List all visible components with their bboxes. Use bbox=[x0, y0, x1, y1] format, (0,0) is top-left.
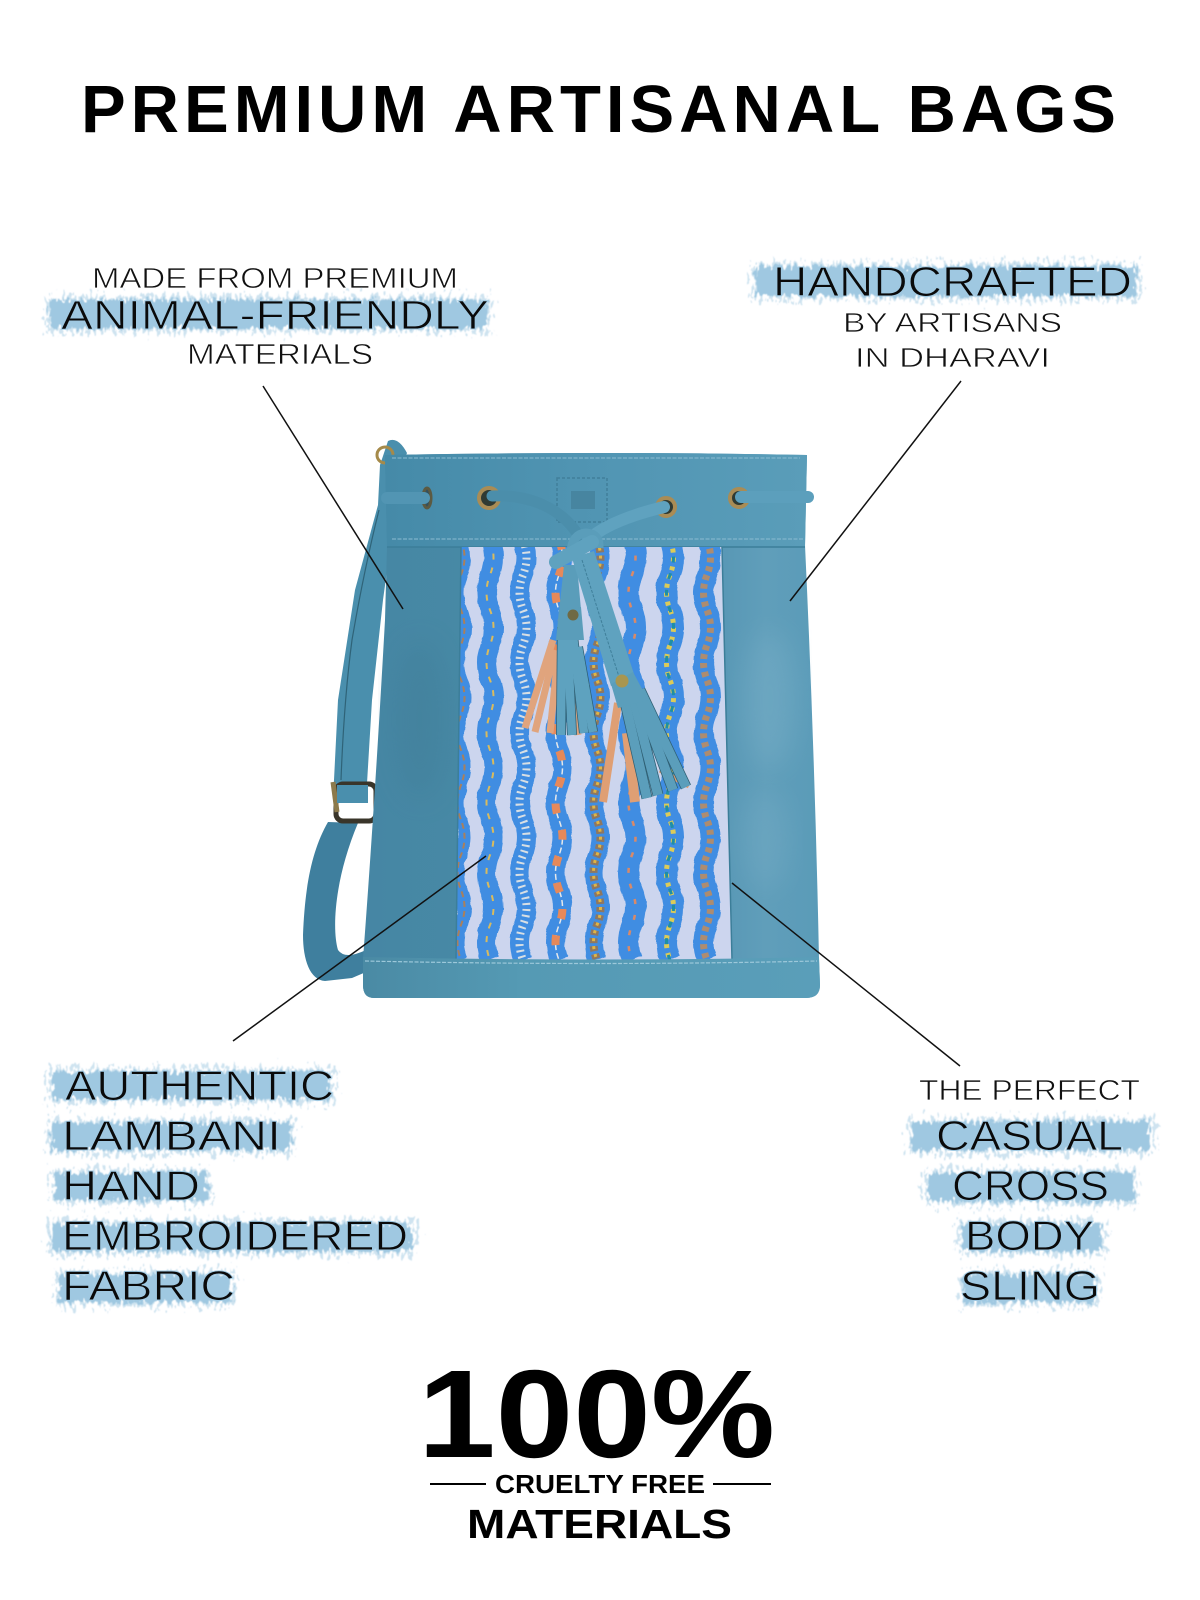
callout: handcrafted: HANDCRAFTED bbox=[773, 258, 1132, 305]
callout: animal-friendly materials: MADE FROM PREMIUM bbox=[92, 263, 458, 295]
callout: handcrafted: IN DHARAVI bbox=[855, 342, 1050, 373]
tassel: left bbox=[525, 565, 593, 735]
callout: lambani embroidery list: HAND bbox=[62, 1162, 200, 1209]
leader line: cross body sling bbox=[732, 883, 960, 1066]
callout: animal-friendly materials: ANIMAL-FRIENDLY bbox=[61, 292, 489, 338]
eyelets bbox=[423, 488, 748, 516]
callout: lambani embroidery list: FABRIC bbox=[62, 1262, 235, 1309]
badge: 100% cruelty free materials: 100% bbox=[418, 1345, 775, 1484]
panel seams bbox=[456, 547, 732, 960]
bag illustration bbox=[303, 440, 820, 998]
bag body bbox=[363, 453, 820, 998]
callout: casual cross body sling: CASUAL bbox=[936, 1112, 1123, 1159]
callout: casual cross body sling: BODY bbox=[965, 1212, 1094, 1259]
embroidered fabric panel bbox=[450, 540, 740, 965]
callout: lambani embroidery list: AUTHENTIC bbox=[65, 1062, 334, 1109]
callout: casual cross body sling bbox=[909, 1075, 1153, 1309]
tassel: right bbox=[572, 551, 689, 802]
callout: lambani embroidery list: EMBROIDERED bbox=[62, 1212, 408, 1259]
badge: 100% cruelty free materials bbox=[418, 1345, 775, 1547]
drawstring cords bbox=[387, 496, 808, 540]
knot bbox=[556, 533, 599, 562]
top band bbox=[385, 453, 807, 547]
callout: handcrafted bbox=[753, 258, 1139, 373]
strap buckle bbox=[333, 782, 376, 821]
badge: 100% cruelty free materials: CRUELTY FREE bbox=[495, 1469, 705, 1499]
badge: 100% cruelty free materials: MATERIALS bbox=[467, 1501, 732, 1547]
title: PREMIUM ARTISANAL BAGS bbox=[81, 72, 1116, 147]
leader line: animal-friendly materials bbox=[263, 386, 403, 609]
bag strap bbox=[303, 440, 407, 981]
callout: casual cross body sling: SLING bbox=[960, 1262, 1100, 1309]
callout: casual cross body sling: CROSS bbox=[952, 1162, 1109, 1209]
callout: handcrafted: BY ARTISANS bbox=[843, 307, 1062, 338]
leather stamp bbox=[557, 478, 607, 522]
leader line: handcrafted bbox=[790, 381, 961, 601]
leather shading bbox=[394, 630, 796, 890]
callout: animal-friendly materials bbox=[47, 263, 490, 371]
callout: lambani embroidery list bbox=[49, 1062, 415, 1309]
leader line: lambani fabric bbox=[233, 856, 486, 1041]
callout: casual cross body sling: THE PERFECT bbox=[919, 1075, 1140, 1107]
bottom band bbox=[363, 957, 820, 998]
callout: animal-friendly materials: MATERIALS bbox=[187, 339, 373, 371]
callout: lambani embroidery list: LAMBANI bbox=[62, 1112, 281, 1159]
